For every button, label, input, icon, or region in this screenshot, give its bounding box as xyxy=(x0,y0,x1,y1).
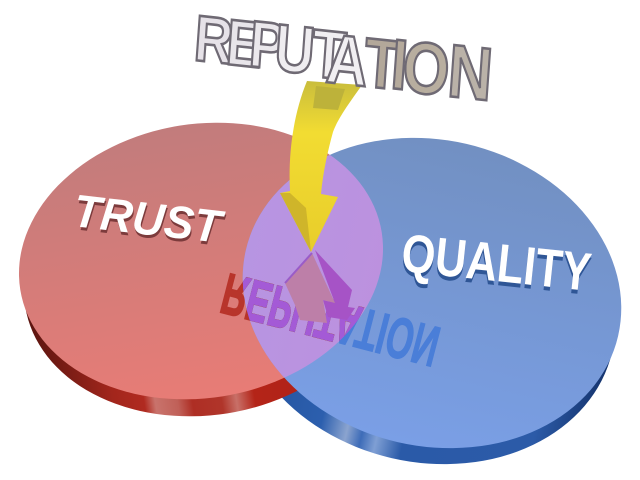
heading: reputation: R xyxy=(192,1,236,78)
heading: reputation: N xyxy=(445,28,495,117)
panel: overlap region xyxy=(242,155,383,378)
heading: reputation: O xyxy=(400,27,452,112)
heading: reputation: T xyxy=(362,23,402,105)
quality disc edge xyxy=(205,117,640,480)
trust disc top xyxy=(0,97,403,425)
label: trust: TRUST xyxy=(71,184,228,253)
arrow: yellow curved arrow xyxy=(280,81,362,252)
reflection on trust disc: REPUTATION xyxy=(215,260,446,379)
heading: reputation: E xyxy=(224,5,265,82)
trust disc edge xyxy=(4,114,408,442)
label: quality: QUALITY xyxy=(398,227,594,307)
reflected arrow xyxy=(285,250,355,323)
heading: reputation xyxy=(192,1,495,117)
heading: reputation: T xyxy=(309,16,349,95)
quality disc top xyxy=(211,101,640,480)
heading: reputation: P xyxy=(247,6,288,84)
label: quality: QUALITY xyxy=(399,223,594,303)
heading: reputation: U xyxy=(272,10,317,88)
heading: reputation: I xyxy=(389,24,411,105)
reflection inside overlap: REPUTATION xyxy=(215,260,446,379)
heading: reputation: A xyxy=(324,19,371,102)
label: trust: TRUST xyxy=(72,187,228,256)
reflection on quality disc: REPUTATION xyxy=(215,260,446,379)
